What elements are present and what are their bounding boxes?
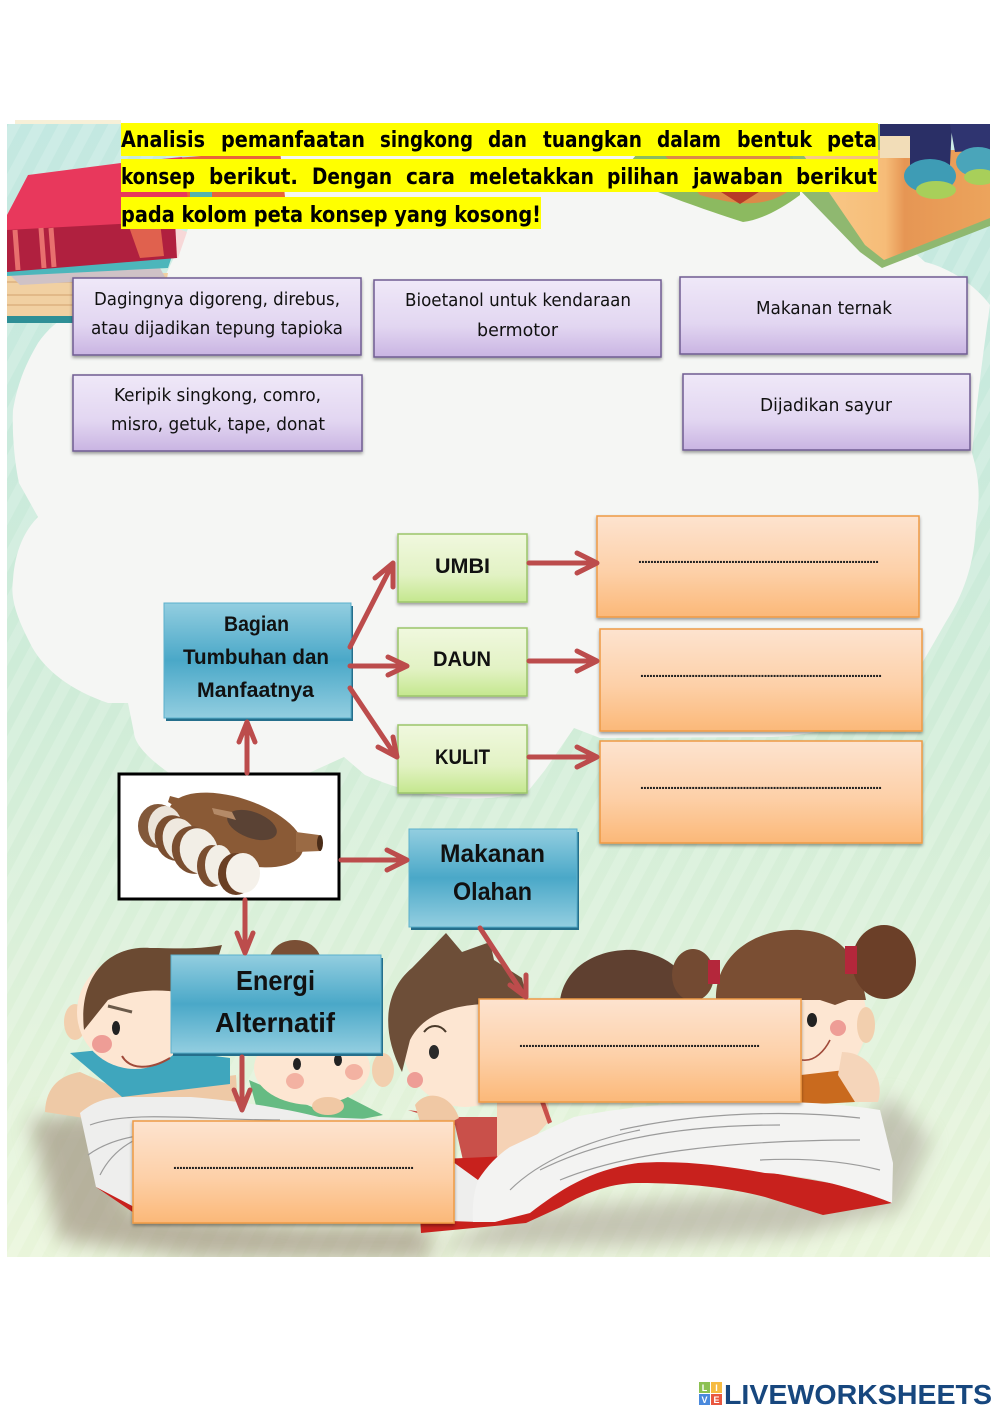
empty answer box: energi alternatif: ................................................................................ [173, 1156, 414, 1172]
empty answer box: umbi [597, 516, 919, 617]
top-right orange book and child's legs [790, 123, 1000, 268]
instruction text with yellow highlight: peta [827, 128, 877, 153]
illustration: children reading a book [30, 925, 930, 1260]
arrow: energi to answer [234, 1057, 250, 1110]
box: makanan olahan: Olahan [453, 878, 532, 906]
answer option: keripik: misro, getuk, tape, donat [111, 414, 325, 435]
empty answer box: makanan olahan [479, 999, 801, 1102]
box: energi alternatif: Energi [236, 965, 315, 996]
arrow: daun to answer [529, 651, 597, 671]
icon: logo squares: L [702, 1383, 708, 1393]
instruction text with yellow highlight: tuangkan [543, 128, 642, 153]
empty answer box: makanan olahan: ................................................................................ [519, 1034, 760, 1050]
answer option: bioetanol: bermotor [477, 320, 558, 341]
instruction text with yellow highlight: singkong [380, 128, 473, 153]
arrow: photo to bagian tumbuhan [239, 722, 255, 773]
arrow: makanan olahan to answer [480, 928, 526, 997]
empty answer box: daun: ................................................................................ [640, 664, 882, 680]
icon: logo squares: E [713, 1395, 720, 1405]
box: umbi: UMBI [435, 555, 490, 578]
box: bagian tumbuhan dan manfaatnya: Manfaatnya [197, 679, 314, 702]
child 3 [372, 933, 552, 1158]
icon: cassava slices [138, 804, 260, 895]
arrow: to kulit [350, 688, 397, 757]
instruction text with yellow highlight: cara [406, 165, 455, 190]
box: bagian tumbuhan dan manfaatnya: Bagian [224, 613, 289, 636]
answer option: makanan ternak: Makanan ternak [756, 298, 893, 319]
answer option: keripik [73, 375, 362, 451]
answer option: sayur: Dijadikan sayur [760, 395, 892, 416]
box: bagian tumbuhan dan manfaatnya: Tumbuhan dan [183, 646, 329, 669]
box: umbi [398, 534, 527, 602]
cream sliver above artwork [15, 120, 121, 124]
top-left stacked books [7, 157, 190, 323]
instruction text with yellow highlight: Analisis [121, 128, 205, 153]
child 1 [45, 945, 238, 1125]
arrow: umbi to answer [529, 553, 597, 573]
white cloud panel [12, 150, 990, 798]
answer option: daging [73, 278, 361, 355]
arrow: photo to makanan olahan [341, 850, 407, 870]
instruction text with yellow highlight: bentuk [737, 128, 813, 153]
liveworksheets logo: LIVEWORKSHEETS [724, 1379, 992, 1410]
instruction text with yellow highlight: berikut. [209, 165, 298, 190]
arrows connecting the concept map [234, 553, 597, 1110]
answer option: daging: atau dijadikan tepung tapioka [91, 318, 343, 339]
child 4 [560, 950, 684, 998]
instruction text with yellow highlight: berikut [796, 165, 878, 190]
instruction text with yellow highlight: Dengan [312, 165, 392, 190]
box: kulit [398, 725, 527, 793]
instruction text with yellow highlight: pemanfaatan [221, 128, 365, 153]
icon: logo squares [699, 1382, 722, 1405]
box: daun: DAUN [433, 648, 491, 671]
icon: logo squares: I [715, 1383, 718, 1393]
answer option: daging: Dagingnya digoreng, direbus, [94, 289, 340, 310]
icon: whole cassava root [160, 778, 323, 882]
box: kulit: KULIT [435, 746, 490, 769]
box: bagian tumbuhan dan manfaatnya [164, 603, 353, 721]
empty answer box: energi alternatif [133, 1121, 454, 1223]
empty answer box: umbi: ................................................................................ [638, 550, 879, 566]
instruction text with yellow highlight: pilihan [607, 165, 679, 190]
instruction text with yellow highlight: konsep [121, 165, 195, 190]
box: makanan olahan: Makanan [440, 840, 545, 868]
answer option: sayur [683, 374, 970, 450]
child 2 [249, 940, 383, 1125]
instruction text with yellow highlight [121, 123, 878, 229]
box: energi alternatif: Alternatif [215, 1007, 336, 1038]
answer option: bioetanol [374, 280, 661, 357]
answer option: makanan ternak [680, 277, 967, 354]
brush shadow [30, 1095, 930, 1260]
background artwork [7, 124, 990, 1257]
arrow: photo to energi [237, 900, 253, 953]
orange and red objects behind the instruction [175, 150, 800, 222]
child's jeans [910, 124, 952, 165]
instruction text with yellow highlight: meletakkan [469, 165, 594, 190]
empty answer box: kulit [600, 741, 922, 843]
arrow: to daun [350, 657, 407, 675]
box: daun [398, 628, 527, 696]
empty answer box: kulit: ................................................................................ [640, 776, 882, 792]
shoes [904, 159, 956, 193]
instruction text with yellow highlight: dan [488, 128, 527, 153]
empty answer box: daun [600, 629, 922, 731]
answer option: keripik: Keripik singkong, comro, [114, 385, 321, 406]
child 5 [672, 925, 916, 1105]
open book [80, 1097, 893, 1233]
arrow: to umbi [350, 563, 393, 647]
icon: logo squares: V [701, 1395, 708, 1405]
instruction text with yellow highlight: pada kolom peta konsep yang kosong! [121, 203, 541, 228]
instruction text with yellow highlight: jawaban [692, 165, 783, 190]
instruction text with yellow highlight: dalam [657, 128, 721, 153]
arrow: kulit to answer [529, 747, 597, 767]
box: energi alternatif [171, 955, 383, 1056]
answer option: bioetanol: Bioetanol untuk kendaraan [405, 290, 631, 311]
box: makanan olahan [409, 829, 579, 930]
cassava photo frame [119, 774, 339, 899]
